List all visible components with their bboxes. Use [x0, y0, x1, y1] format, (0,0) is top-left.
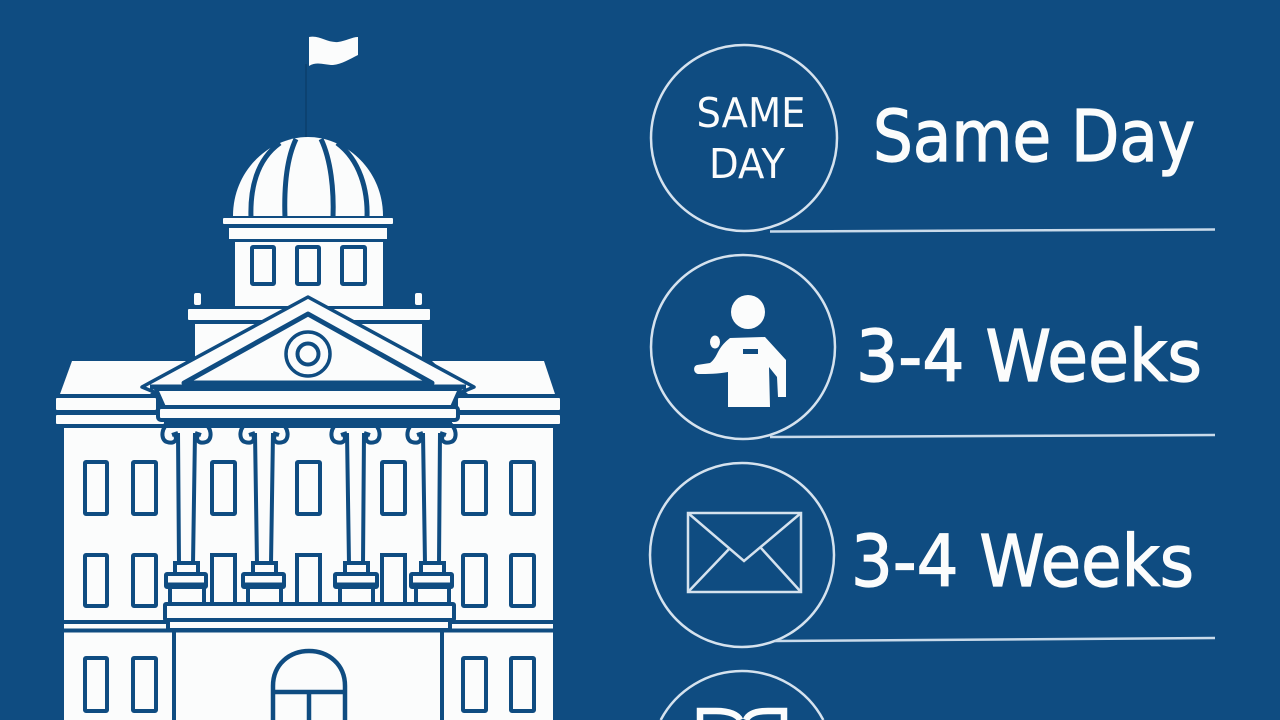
row: partially visible circle: [661, 671, 823, 720]
pediment: [142, 297, 474, 392]
circle: envelope icon: [650, 463, 834, 647]
columns: [162, 423, 456, 603]
dome: [233, 137, 383, 218]
windows: [85, 462, 534, 711]
column 1: [162, 423, 211, 603]
flag and pole: [306, 37, 358, 137]
label: 3-4 weeks: 3-4 Weeks: [856, 315, 1202, 398]
circle: clerk icon: [651, 255, 835, 439]
divider line: [770, 435, 1215, 437]
facade wall: [64, 428, 553, 720]
circle: same day badge: SAME: [696, 89, 806, 137]
arched door: [273, 651, 345, 720]
circle: same day badge: [651, 45, 837, 231]
column 2: [240, 423, 288, 603]
divider line: [770, 230, 1215, 232]
icon: cropped glyph: [700, 711, 784, 720]
side roofs: [60, 361, 555, 394]
illustration: government building: [56, 37, 560, 720]
row: in person: [651, 255, 1215, 439]
column 4: [407, 423, 456, 603]
label: 3-4 weeks: 3-4 Weeks: [851, 520, 1194, 603]
column 3: [331, 423, 380, 603]
circle: same day badge: DAY: [709, 140, 786, 188]
divider line: [775, 638, 1215, 641]
drum with windows: [223, 218, 393, 306]
entablature: [156, 389, 460, 420]
row: by mail: [650, 463, 1215, 647]
upper tier: [188, 293, 430, 360]
label: same day: Same Day: [873, 95, 1195, 178]
cornice: [56, 398, 560, 424]
balcony: [165, 604, 454, 630]
row: same day: [651, 45, 1215, 232]
